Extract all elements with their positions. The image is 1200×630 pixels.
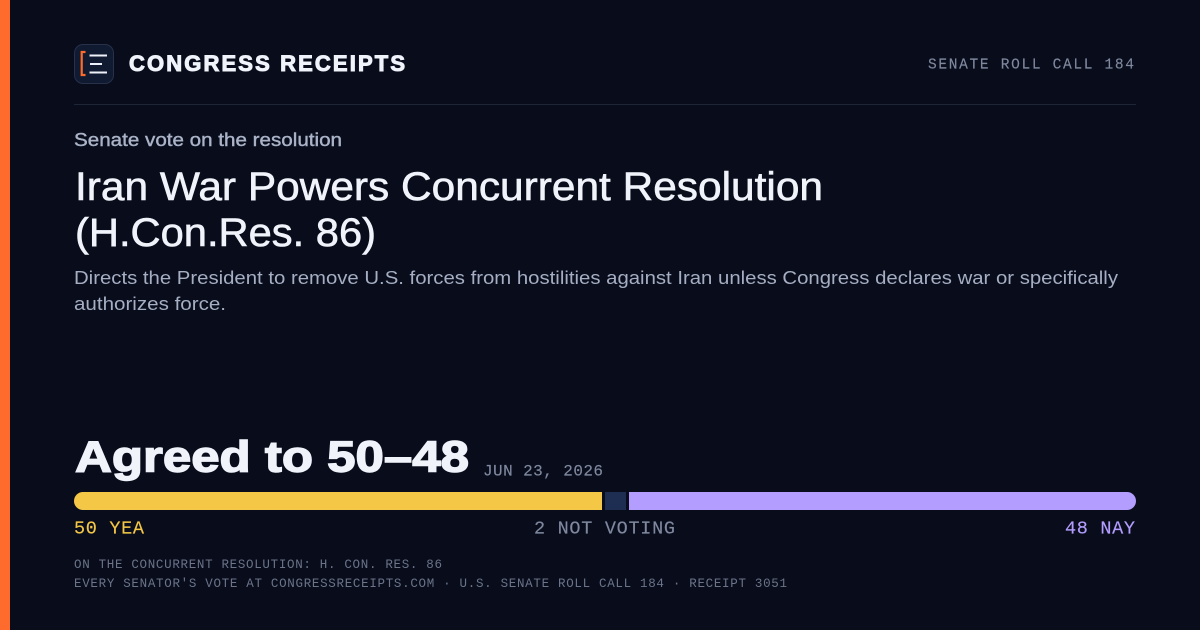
footer xyxy=(74,558,787,591)
vote labels: 50 YEA xyxy=(74,518,145,540)
vote labels xyxy=(74,518,1135,540)
description xyxy=(74,267,1119,314)
nay segment xyxy=(629,492,1136,510)
vote date: JUN 23, 2026 xyxy=(483,462,603,480)
vote labels: 2 NOT VOTING xyxy=(534,518,675,540)
description: Directs the President to remove U.S. forces from hostilities against Iran unless Congress declares war or specifically xyxy=(74,267,1119,288)
title: (H.Con.Res. 86) xyxy=(75,211,376,255)
result headline: Agreed to 50–48 xyxy=(75,432,469,482)
footer: ON THE CONCURRENT RESOLUTION: H. CON. RES. 86 xyxy=(74,558,442,572)
eyebrow: Senate vote on the resolution xyxy=(74,130,342,150)
title xyxy=(75,165,823,255)
title: Iran War Powers Concurrent Resolution xyxy=(75,165,823,209)
roll call label: SENATE ROLL CALL 184 xyxy=(928,58,1134,74)
vote labels: 48 NAY xyxy=(1065,518,1135,540)
vote bar xyxy=(74,492,1136,510)
yea segment xyxy=(74,492,602,510)
accent bar xyxy=(0,0,10,630)
description: authorizes force. xyxy=(74,293,226,314)
header xyxy=(74,44,1134,84)
icon: logo xyxy=(74,44,114,84)
brand name: CONGRESS RECEIPTS xyxy=(129,51,405,76)
footer: EVERY SENATOR'S VOTE AT CONGRESSRECEIPTS.COM · U.S. SENATE ROLL CALL 184 · RECEIPT 3051 xyxy=(74,577,787,591)
not voting segment xyxy=(605,492,626,510)
